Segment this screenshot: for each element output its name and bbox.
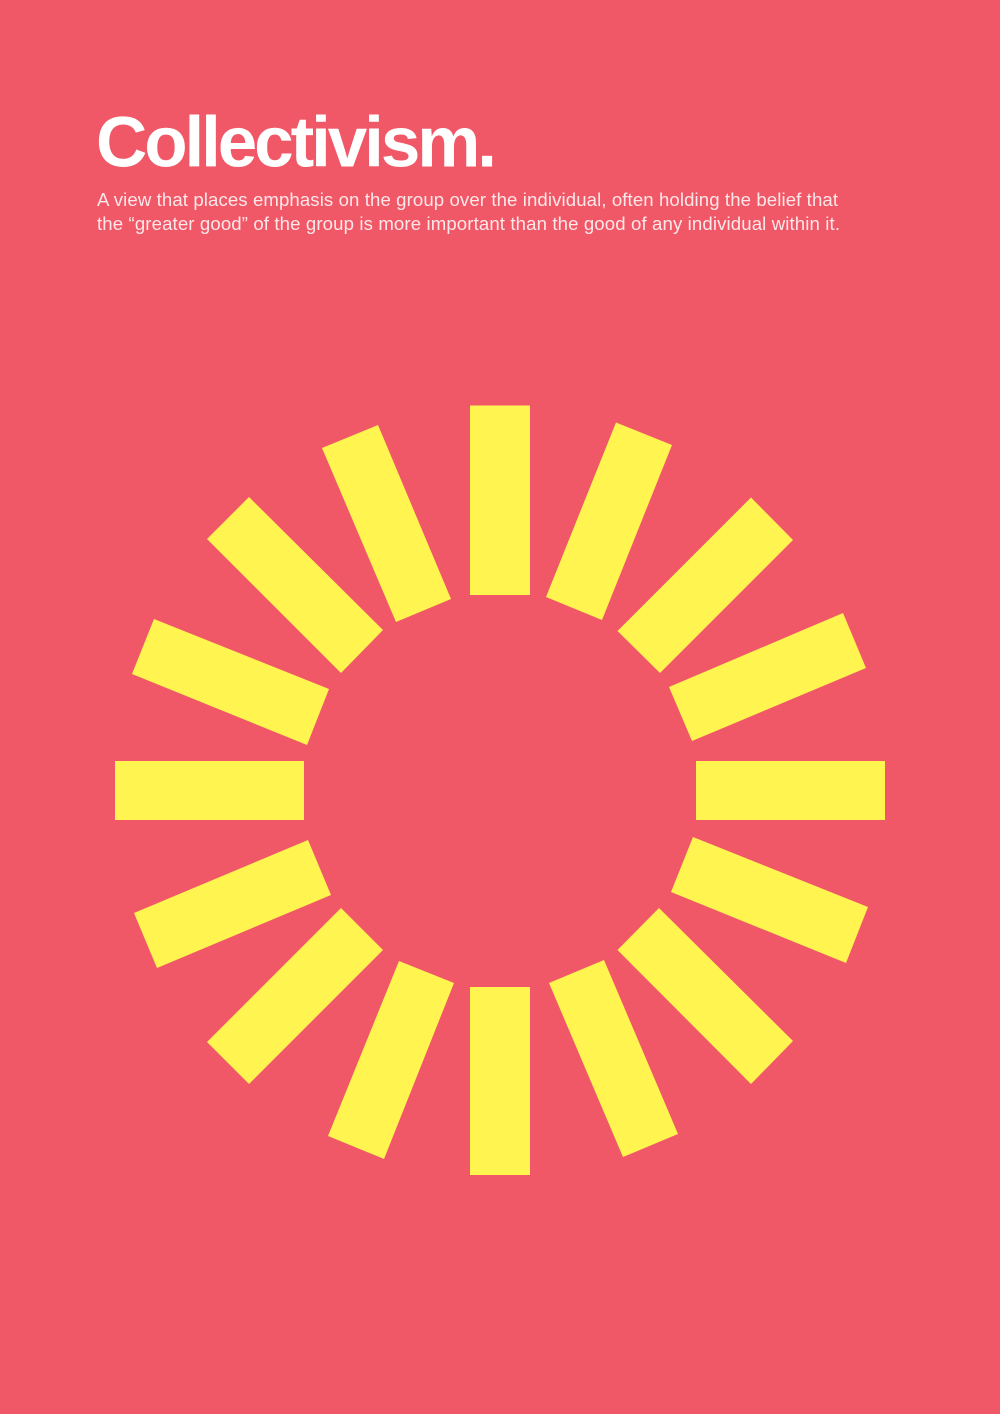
description text: the “greater good” of the group is more important than the good of any individual within it. xyxy=(97,213,840,234)
title: Collectivism. xyxy=(96,104,497,182)
description text: A view that places emphasis on the group over the individual, often holding the belief that xyxy=(97,189,839,210)
description text xyxy=(97,189,840,234)
radial ring of yellow bars xyxy=(115,406,885,1175)
